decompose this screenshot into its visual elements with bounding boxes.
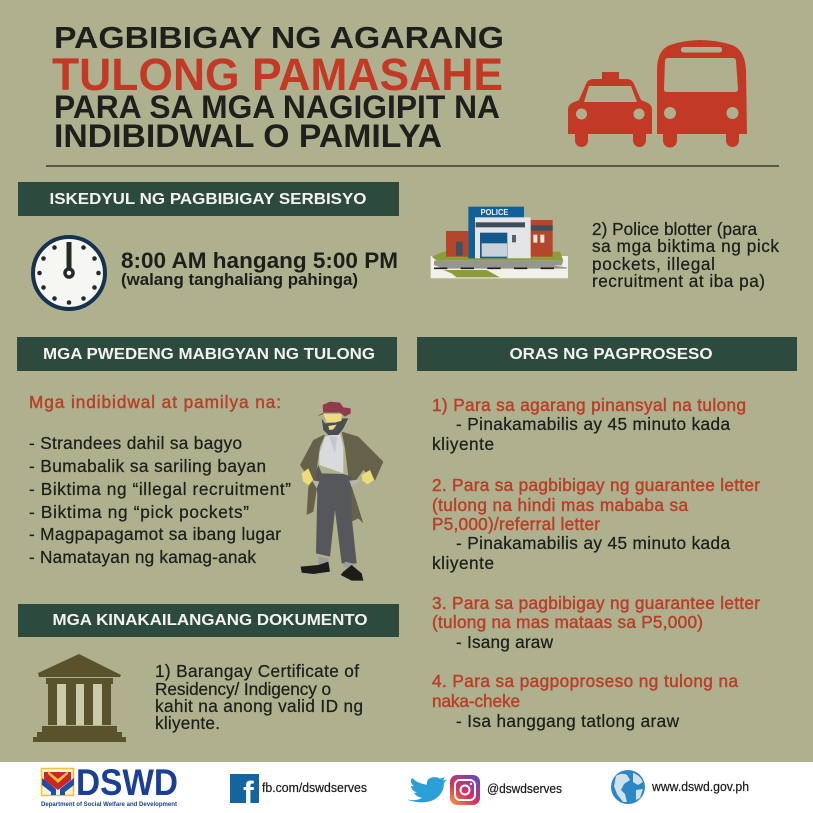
eligible list: - Namatayan ng kamag-anak [29, 547, 256, 567]
title: INDIBIDWAL O PAMILYA [54, 118, 442, 154]
eligible list: Mga indibidwal at pamilya na: [29, 392, 281, 412]
icon: facebook [230, 774, 259, 811]
heading: mga kinakailangang dokumento [18, 604, 399, 637]
title: PAGBIBIGAY NG AGARANG [54, 20, 504, 55]
processing time list: naka-cheke [432, 691, 520, 711]
heading: oras ng pagproseso: ORAS NG PAGPROSESO [510, 346, 712, 363]
barangay certificate text: Residency/ Indigency o [155, 679, 331, 699]
barangay certificate text: 1) Barangay Certificate of [155, 661, 359, 681]
processing time list: (tulong na hindi mas mababa sa [432, 495, 688, 515]
eligible list: - Strandees dahil sa bagyo [29, 433, 242, 453]
police blotter text: 2) Police blotter (para [592, 219, 757, 239]
DSWD logo: DSWD [76, 762, 178, 803]
processing time list: 4. Para sa pagpoproseso ng tulong na [432, 671, 738, 691]
processing time list: P5,000)/referral letter [432, 514, 600, 534]
police blotter text [592, 219, 779, 291]
processing time list: - Pinakamabilis ay 45 minuto kada [456, 533, 730, 553]
processing time list: kliyente [432, 434, 494, 454]
icon: facebook: f [243, 775, 254, 811]
barangay certificate text: kahit na anong valid ID ng [155, 696, 363, 716]
DSWD logo: Department of Social Welfare and Development [41, 801, 178, 808]
heading: mga pwedeng mabigyan [17, 337, 397, 371]
heading: iskedyul [18, 182, 399, 216]
title: TULONG PAMASAHE [52, 49, 503, 100]
heading: iskedyul: ISKEDYUL NG PAGBIBIGAY SERBISYO [50, 191, 366, 208]
icon: instagram [450, 775, 480, 805]
social handle: @dswdserves [487, 782, 562, 796]
processing time list: 1) Para sa agarang pinansyal na tulong [432, 395, 746, 415]
police blotter text: recruitment at iba pa) [592, 271, 765, 291]
eligible list: - Biktima ng “pick pockets” [29, 502, 249, 522]
icon: man with empty pockets [300, 402, 383, 581]
eligible list [29, 392, 291, 567]
icon: clock [33, 237, 105, 309]
schedule text [121, 248, 398, 289]
processing time list: 2. Para sa pagbibigay ng guarantee letter [432, 475, 760, 495]
processing time list [432, 395, 760, 731]
icon: police station: POLICE [481, 208, 509, 217]
DSWD logo [41, 762, 178, 808]
eligible list: - Magpapagamot sa ibang lugar [29, 524, 281, 544]
processing time list: - Pinakamabilis ay 45 minuto kada [456, 414, 730, 434]
processing time list: (tulong na mas mataas sa P5,000) [432, 612, 703, 632]
schedule text: 8:00 AM hangang 5:00 PM [121, 248, 398, 273]
processing time list: - Isang araw [456, 632, 554, 652]
heading: oras ng pagproseso [417, 337, 797, 371]
schedule text: (walang tanghaliang pahinga) [121, 271, 358, 289]
heading: mga pwedeng mabigyan: MGA PWEDENG MABIGYAN NG TULONG [43, 346, 375, 363]
barangay certificate text [155, 661, 363, 733]
facebook handle: fb.com/dswdserves [262, 781, 367, 795]
police blotter text: sa mga biktima ng pick [592, 236, 779, 256]
icon: taxi [568, 72, 652, 147]
icon: twitter [408, 777, 447, 802]
title: PARA SA MGA NAGIGIPIT NA [54, 89, 500, 125]
processing time list: - Isa hanggang tatlong araw [456, 711, 680, 731]
barangay certificate text: kliyente. [155, 713, 220, 733]
title [52, 20, 504, 154]
icon: globe [611, 770, 645, 804]
processing time list: kliyente [432, 553, 494, 573]
eligible list: - Biktima ng “illegal recruitment” [29, 479, 291, 499]
icon: bus [657, 40, 747, 148]
footer band [0, 762, 813, 813]
processing time list: 3. Para sa pagbibigay ng guarantee letter [432, 593, 760, 613]
icon: government building [33, 654, 126, 742]
website: www.dswd.gov.ph [651, 780, 749, 794]
icon: police station [431, 207, 568, 278]
police blotter text: pockets, illegal [592, 254, 715, 274]
heading: mga kinakailangang dokumento: MGA KINAKAILANGANG DOKUMENTO [52, 612, 368, 629]
eligible list: - Bumabalik sa sariling bayan [29, 456, 266, 476]
